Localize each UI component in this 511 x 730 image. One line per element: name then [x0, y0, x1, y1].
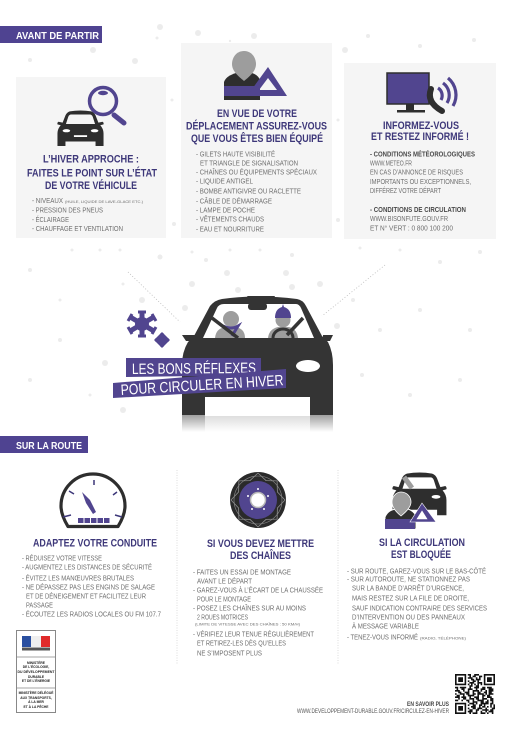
logo: ministère: ET À LA PÊCHE	[24, 704, 49, 709]
checklist: équipement: - LIQUIDE ANTIGEL	[196, 178, 253, 186]
heading: en vue de votre déplacement: QUE VOUS ÊTES BIEN ÉQUIPÉ	[191, 132, 323, 145]
dotted line: left panel to car	[128, 272, 180, 322]
icon: stopped car, person and triangle	[385, 473, 447, 529]
list: conduite: - AUGMENTEZ LES DISTANCES DE SÉCURITÉ	[22, 562, 152, 572]
list: conduite: - ÉCOUTEZ LES RADIOS LOCALES OU FM 107.7	[22, 610, 161, 618]
dotted line: right panel to car	[322, 265, 385, 316]
heading: en vue de votre déplacement: DÉPLACEMENT ASSUREZ-VOUS	[186, 120, 327, 132]
checklist: véhicule: - ÉCLAIRAGE	[32, 215, 69, 224]
banner: les bons réflexes pour circuler en hiver	[113, 358, 286, 399]
checklist: équipement: ET TRIANGLE DE SIGNALISATION	[200, 160, 298, 168]
text: conditions de circulation: - CONDITIONS DE CIRCULATION	[370, 207, 466, 214]
checklist: équipement: - VÊTEMENTS CHAUDS	[196, 214, 264, 224]
list: circulation bloquée: SUR LA BANDE D’ARRÊT D’URGENCE,	[352, 584, 464, 592]
checklist: véhicule: - NIVEAUX	[32, 198, 63, 205]
list: chaînes: NE S’IMPOSENT PLUS	[197, 650, 262, 658]
logo: ministère: DURABLE	[28, 675, 45, 679]
list: chaînes: - GAREZ-VOUS À L’ÉCART DE LA CHAUSSÉE	[193, 586, 323, 594]
QR code	[455, 674, 495, 714]
logo: ministère: MINISTÈRE DÉLÉGUÉ	[19, 690, 54, 695]
text: conditions météorologiques: DIFFÉREZ VOTRE DÉPART	[370, 186, 442, 195]
text: conditions de circulation: ET N° VERT : 0 800 100 200	[370, 224, 453, 232]
text: conditions de circulation: WWW.BISONFUTE.GOUV.FR	[370, 216, 448, 223]
list: circulation bloquée: D’INTERVENTION OU DES PANNEAUX	[352, 614, 465, 622]
checklist: équipement: - BOMBE ANTIGIVRE OU RACLETTE	[196, 188, 301, 196]
list: circulation bloquée: SAUF INDICATION CONTRAIRE DES SERVICES	[352, 606, 487, 612]
heading: l'hiver approche: DE VOTRE VÉHICULE	[45, 179, 137, 192]
list: conduite: ET DE DÉNEIGEMENT ET FACILITEZ LEUR	[26, 592, 146, 600]
checklist: véhicule: - PRESSION DES PNEUS	[32, 208, 103, 214]
heading: informez-vous	[371, 120, 469, 143]
heading: en vue de votre déplacement	[186, 108, 327, 145]
list: chaînes: ET RETIREZ-LES DÈS QU’ELLES	[197, 638, 286, 648]
heading: si la circulation est bloquée: SI LA CIRCULATION	[379, 537, 465, 549]
checklist: véhicule: (HUILE, LIQUIDE DE LAVE-GLACE ETC.)	[65, 199, 144, 204]
list: chaînes	[193, 570, 323, 658]
list: chaînes: - POSEZ LES CHAÎNES SUR AU MOINS	[193, 604, 306, 612]
section heading: avant de partir	[0, 26, 102, 43]
panel: informations	[344, 63, 496, 239]
list: chaînes: - FAITES UN ESSAI DE MONTAGE	[193, 570, 291, 576]
section heading: sur la route	[0, 436, 88, 453]
text: conditions météorologiques: IMPORTANTS OU EXCEPTIONNELS,	[370, 179, 471, 186]
logo: ministère: DU DÉVELOPPEMENT	[18, 669, 54, 674]
banner: les bons réflexes pour circuler en hiver: POUR CIRCULER EN HIVER	[120, 372, 284, 399]
icon: car under magnifier	[57, 88, 124, 146]
heading: l'hiver approche: FAITES LE POINT SUR L’ÉTAT	[27, 166, 157, 180]
text: conditions météorologiques	[370, 150, 475, 195]
list: chaînes: AVANT LE DÉPART	[197, 576, 253, 586]
list: circulation bloquée: (RADIO, TÉLÉPHONE)	[420, 636, 467, 640]
panel: équipement	[181, 43, 332, 238]
list: circulation bloquée: MAIS RESTEZ SUR LA FILE DE DROITE,	[352, 596, 469, 602]
icon: person with triangle	[224, 51, 287, 100]
heading: si vous devez mettre des chaînes: DES CHAÎNES	[230, 549, 291, 562]
heading: si vous devez mettre des chaînes: SI VOUS DEVEZ METTRE	[207, 538, 314, 550]
heading: si la circulation est bloquée	[379, 537, 465, 561]
icon: large snowflake	[128, 311, 156, 337]
text: en savoir plus	[297, 702, 450, 715]
column: circulation bloquée	[347, 473, 487, 642]
text: conditions météorologiques: WWW.METEO.FR	[370, 160, 412, 168]
passenger: left	[212, 311, 245, 338]
checklist: véhicule: - CHAUFFAGE ET VENTILATION	[32, 226, 123, 233]
heading: en vue de votre déplacement: EN VUE DE VOTRE	[217, 108, 297, 120]
section heading: avant de partir: AVANT DE PARTIR	[16, 31, 100, 42]
text: conditions météorologiques: EN CAS D’ANNONCE DE RISQUES	[370, 170, 463, 176]
heading: l'hiver approche	[27, 154, 157, 192]
checklist: équipement: - CÂBLE DE DÉMARRAGE	[196, 196, 272, 206]
checklist: véhicule	[32, 198, 144, 233]
heading: informez-vous: ET RESTEZ INFORMÉ !	[371, 130, 469, 143]
heading: informez-vous: INFORMEZ-VOUS	[383, 120, 459, 132]
illustration: car with passengers	[182, 296, 333, 432]
checklist: équipement: - CHAÎNES OU ÉQUIPEMENTS SPÉCIAUX	[196, 168, 317, 176]
panel: état du véhicule	[16, 77, 166, 238]
list: conduite: PASSAGE	[26, 602, 53, 610]
logo: ministère: ET DE L’ÉNERGIE	[22, 678, 51, 683]
logo: ministère	[16, 630, 56, 712]
icon: speedometer	[61, 474, 125, 526]
icon: small snowflake	[154, 332, 170, 348]
text: en savoir plus: EN SAVOIR PLUS	[407, 702, 449, 708]
list: conduite: - NE DÉPASSEZ PAS LES ENGINS DE SALAGE	[22, 582, 155, 592]
icon: screen and phone	[387, 73, 456, 112]
list: circulation bloquée: À MESSAGE VARIABLE	[352, 622, 419, 630]
list: circulation bloquée: - SUR AUTOROUTE, NE STATIONNEZ PAS	[347, 576, 470, 584]
list: circulation bloquée: - SUR ROUTE, GAREZ-VOUS SUR LE BAS-CÔTÉ	[347, 566, 486, 576]
text: conditions météorologiques: - CONDITIONS MÉTÉOROLOGIQUES	[370, 150, 475, 158]
checklist: équipement: - LAMPE DE POCHE	[196, 208, 255, 214]
list: chaînes: (LIMITE DE VITESSE AVEC DES CHAÎNES : 50 KM/H)	[195, 622, 301, 626]
logo: ministère: À LA MER	[28, 699, 45, 704]
checklist: équipement: - GILETS HAUTE VISIBILITÉ	[196, 150, 275, 158]
passenger: right	[268, 304, 303, 338]
list: conduite	[22, 554, 161, 618]
logo: ministère: DE L’ÉCOLOGIE,	[23, 664, 49, 669]
text: conditions de circulation	[370, 207, 466, 232]
column: adaptez votre conduite	[22, 474, 161, 618]
checklist: équipement: - EAU ET NOURRITURE	[196, 226, 264, 234]
heading: adaptez votre conduite: ADAPTEZ VOTRE CONDUITE	[33, 538, 157, 550]
list: conduite: - ÉVITEZ LES MANŒUVRES BRUTALES	[22, 574, 134, 582]
logo: ministère: AUX TRANSPORTS,	[20, 696, 52, 700]
list: chaînes: 2 ROUES MOTRICES	[197, 614, 248, 622]
icon: tire with chain	[230, 472, 286, 528]
list: conduite: - RÉDUISEZ VOTRE VITESSE	[22, 554, 102, 562]
list: circulation bloquée: - TENEZ-VOUS INFORMÉ	[347, 632, 418, 642]
section heading: sur la route: SUR LA ROUTE	[16, 441, 82, 452]
list: chaînes: POUR LE MONTAGE	[197, 596, 251, 604]
checklist: équipement	[196, 150, 317, 234]
heading: si vous devez mettre des chaînes	[207, 538, 314, 562]
column: chaînes	[193, 472, 323, 658]
logo: ministère: MINISTÈRE	[27, 660, 46, 665]
banner: les bons réflexes pour circuler en hiver: LES BONS RÉFLEXES	[132, 360, 256, 378]
text: en savoir plus: WWW.DEVELOPPEMENT-DURABLE.GOUV.FR/CIRCULEZ-EN-HIVER	[297, 709, 450, 715]
heading: si la circulation est bloquée: EST BLOQUÉE	[391, 548, 451, 561]
list: circulation bloquée	[347, 566, 487, 642]
list: chaînes: - VÉRIFIEZ LEUR TENUE RÉGULIÈREMENT	[193, 630, 315, 638]
heading: l'hiver approche: L’HIVER APPROCHE :	[43, 154, 139, 166]
